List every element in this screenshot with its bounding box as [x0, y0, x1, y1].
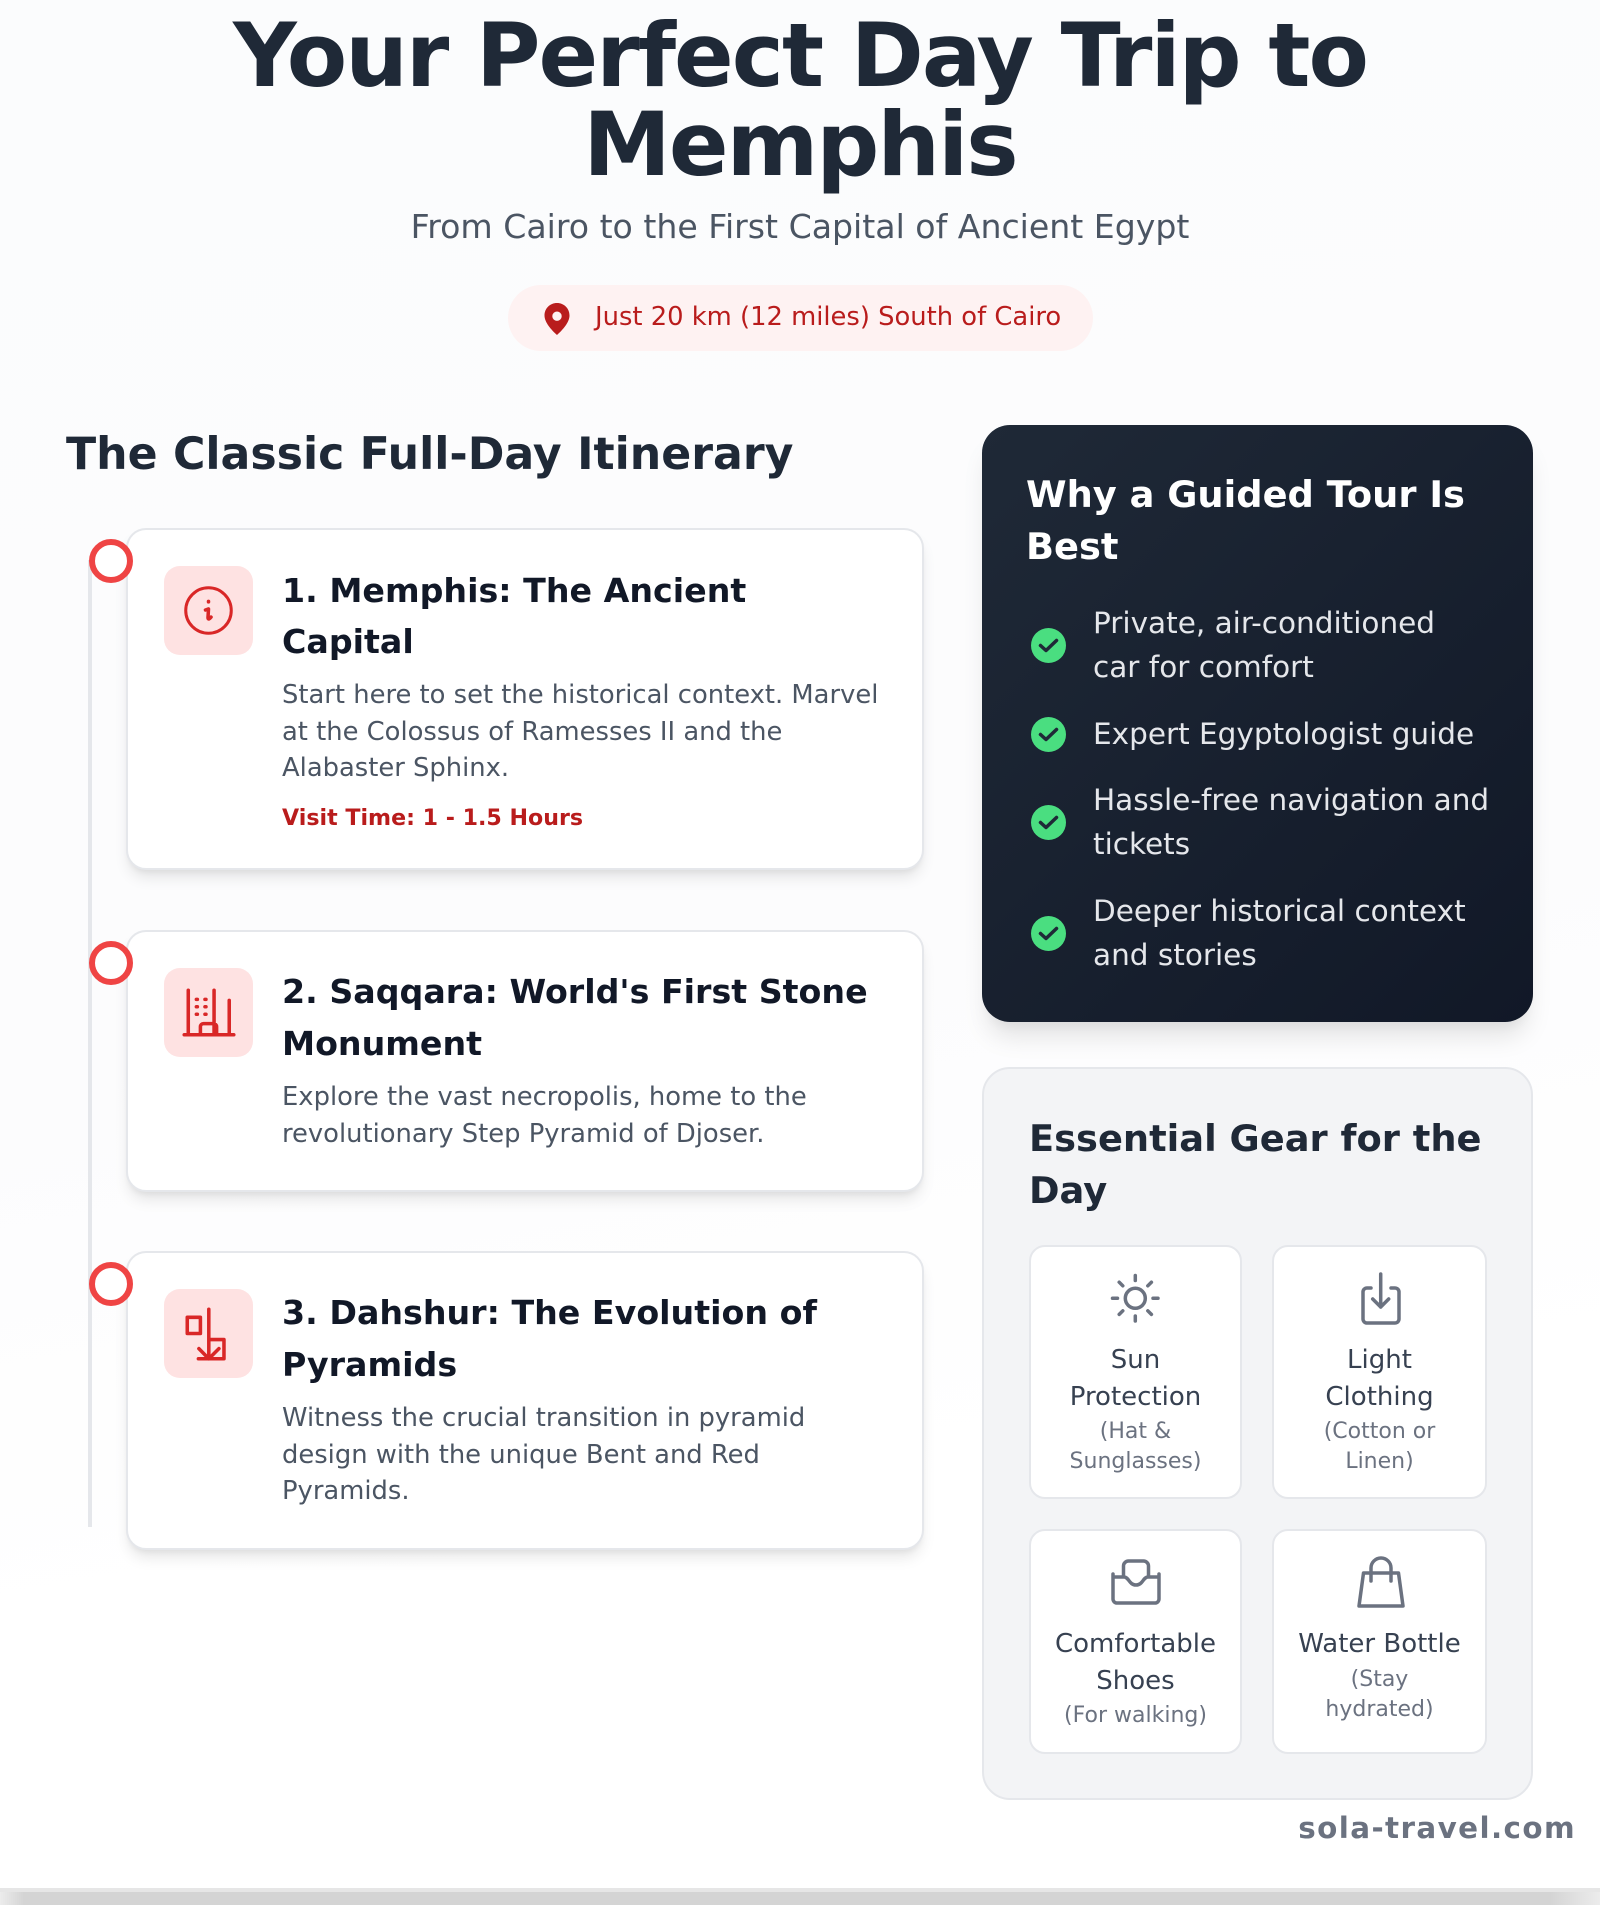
icon: check 3: [1031, 805, 1066, 840]
marker: stop 3: [89, 1262, 133, 1306]
title: Your Perfect Day Trip to: [233, 4, 1367, 106]
location pill: [508, 285, 1093, 351]
panel: essential gear: [982, 1067, 1533, 1800]
sun protection note: [1070, 1419, 1201, 1474]
gear tile: sun protection: [1029, 1245, 1242, 1499]
icon: shoes: [1111, 1559, 1161, 1605]
light clothing label: [1325, 1345, 1434, 1412]
guided tour heading: Best: [1026, 525, 1118, 568]
panel: stop 1 card: [126, 528, 924, 870]
icon: check 4: [1031, 916, 1066, 951]
icon: clothing: [1361, 1272, 1401, 1325]
water bottle label: Water Bottle: [1298, 1629, 1461, 1659]
stop 3 description: [282, 1403, 805, 1506]
water bottle note: hydrated): [1325, 1696, 1434, 1722]
panel: stop 3 card: [126, 1251, 924, 1550]
light clothing note: Linen): [1345, 1448, 1414, 1474]
stop 1 title: Capital: [282, 622, 414, 661]
light clothing note: (Cotton or: [1324, 1419, 1435, 1444]
stop 3 title: 3. Dahshur: The Evolution of: [282, 1293, 817, 1332]
benefit 1: Private, air-conditioned: [1093, 606, 1435, 640]
stop 3 title: Pyramids: [282, 1344, 457, 1384]
stop 3 description: Pyramids.: [282, 1476, 410, 1506]
pill text: Just 20 km (12 miles) South of Cairo: [595, 302, 1061, 332]
gear heading: [1029, 1117, 1482, 1212]
comfortable shoes label: [1055, 1629, 1216, 1696]
stop 2 title: Monument: [282, 1024, 482, 1062]
stop 2 title: 2. Saqqara: World's First Stone: [282, 972, 868, 1011]
stop 1 description: at the Colossus of Ramesses II and the: [282, 717, 782, 747]
benefit 3: [1093, 783, 1489, 861]
panel: why a guided tour: [982, 425, 1533, 1022]
water bottle note: [1325, 1667, 1434, 1722]
sun protection note: Sunglasses): [1070, 1448, 1201, 1474]
stop 1 description: Start here to set the historical context. Marvel: [282, 680, 878, 710]
comfortable shoes label: Comfortable: [1055, 1629, 1216, 1659]
comfortable shoes label: Shoes: [1096, 1666, 1175, 1696]
stop 2 title: [282, 972, 868, 1062]
icon: check 2: [1031, 717, 1066, 752]
panel: stop 2 card: [126, 930, 924, 1192]
sun protection label: [1070, 1345, 1201, 1412]
sun protection label: Protection: [1070, 1382, 1201, 1412]
icon: sun: [1110, 1274, 1160, 1323]
stop 1 title: [282, 571, 746, 661]
guided tour heading: Why a Guided Tour Is: [1026, 473, 1465, 516]
benefit 3: Hassle-free navigation and: [1093, 783, 1489, 817]
guided tour heading: [1026, 473, 1465, 568]
icon: bag: [1357, 1556, 1405, 1608]
light clothing label: Light: [1347, 1345, 1412, 1375]
bottom shadow band: [0, 1888, 1600, 1905]
sun protection label: Sun: [1111, 1345, 1160, 1375]
gear heading: Day: [1029, 1169, 1107, 1212]
water bottle note: (Stay: [1351, 1667, 1408, 1692]
gear tile: comfortable shoes: [1029, 1529, 1242, 1754]
icon tile: pyramid arrow: [164, 1289, 253, 1378]
stop 2 description: Explore the vast necropolis, home to the: [282, 1082, 807, 1112]
title: Memphis: [583, 92, 1017, 196]
stop 2 description: [282, 1082, 807, 1149]
stop 1 title: 1. Memphis: The Ancient: [282, 571, 746, 610]
icon tile: building: [164, 968, 253, 1057]
light clothing label: Clothing: [1325, 1382, 1434, 1412]
stop 3 title: [282, 1293, 818, 1384]
benefit 1: [1093, 606, 1435, 684]
icon: map pin: [544, 303, 570, 335]
comfortable shoes note: (For walking): [1064, 1703, 1207, 1728]
gear tile: light clothing: [1272, 1245, 1487, 1499]
benefit 4: and stories: [1093, 938, 1257, 972]
timeline line: [88, 560, 92, 1527]
stop 1 description: [282, 680, 878, 783]
stop 3 description: Witness the crucial transition in pyramid: [282, 1403, 805, 1433]
benefit 2: Expert Egyptologist guide: [1093, 717, 1474, 751]
footer: website: sola-travel.com: [1298, 1811, 1576, 1845]
sun protection note: (Hat &: [1100, 1419, 1171, 1444]
marker: stop 2: [89, 941, 133, 985]
benefit 4: Deeper historical context: [1093, 894, 1466, 928]
marker: stop 1: [89, 539, 133, 583]
light clothing note: [1324, 1419, 1436, 1474]
stop 3 description: design with the unique Bent and Red: [282, 1440, 760, 1470]
benefit 1: car for comfort: [1093, 650, 1314, 684]
stop 1 visit time: Visit Time: 1 - 1.5 Hours: [282, 805, 583, 831]
heading: itinerary: The Classic Full-Day Itinerary: [66, 429, 793, 480]
gear heading: Essential Gear for the: [1029, 1117, 1482, 1160]
stop 2 description: revolutionary Step Pyramid of Djoser.: [282, 1119, 764, 1149]
icon: check 1: [1031, 628, 1066, 663]
benefit 4: [1093, 894, 1466, 972]
subtitle: From Cairo to the First Capital of Ancient Egypt: [411, 207, 1189, 246]
benefit 3: tickets: [1093, 827, 1190, 861]
stop 1 description: Alabaster Sphinx.: [282, 753, 509, 783]
gear tile: water bottle: [1272, 1529, 1487, 1754]
title: [232, 4, 1367, 196]
icon tile: info: [164, 566, 253, 655]
